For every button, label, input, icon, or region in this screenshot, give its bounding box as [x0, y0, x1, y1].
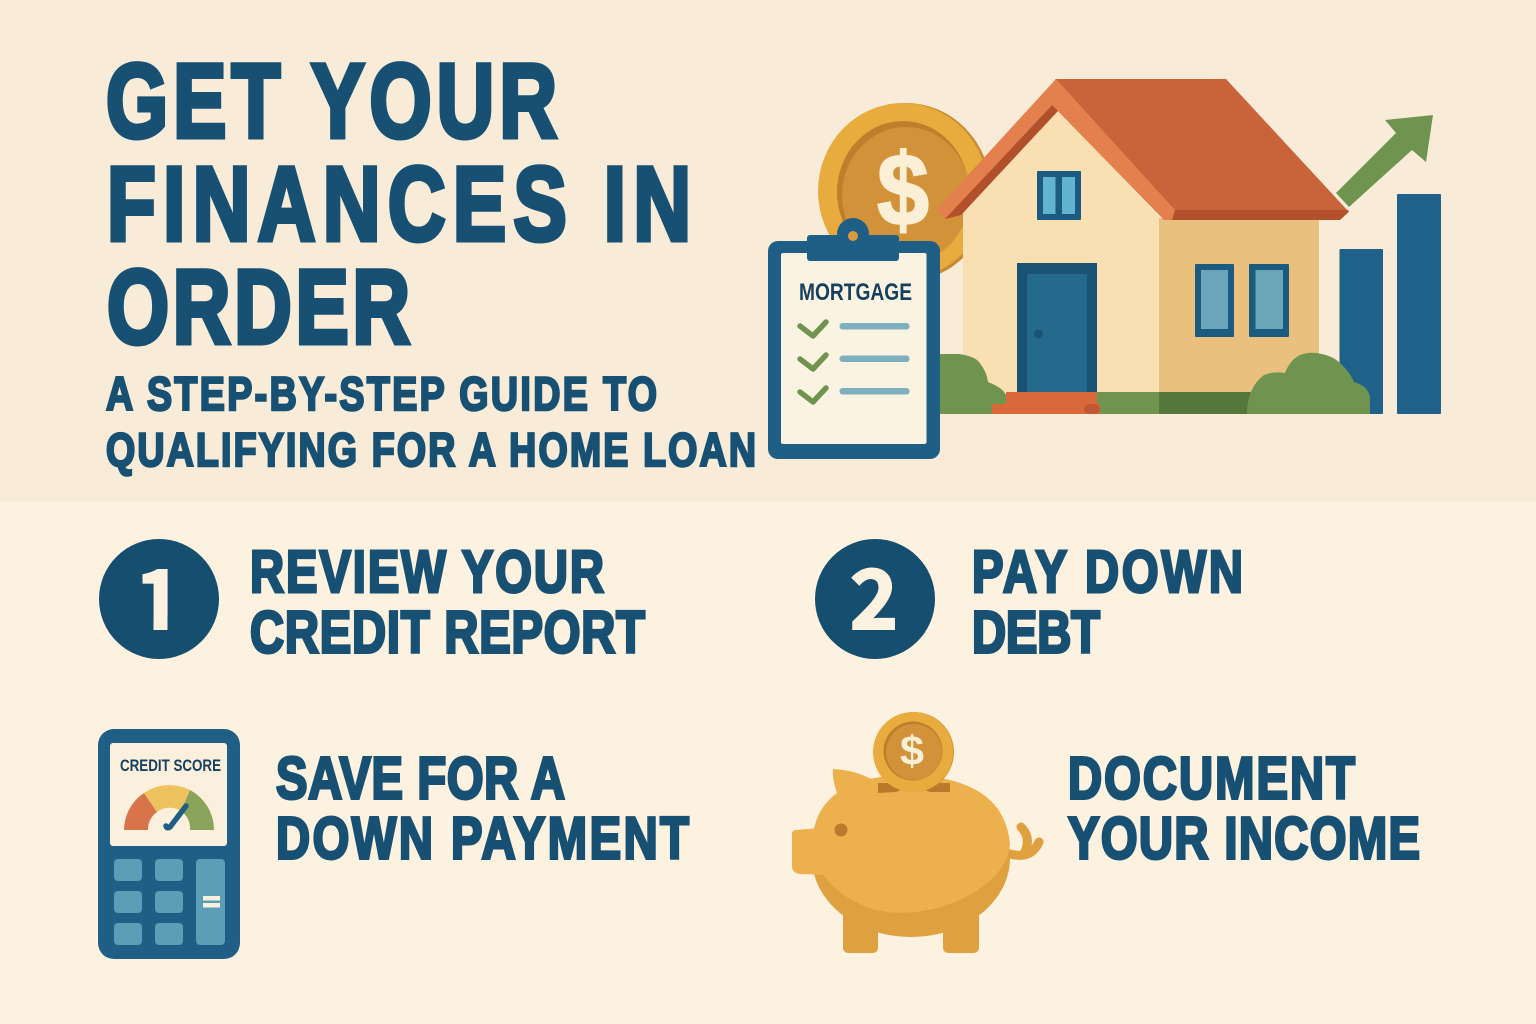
lawn — [1097, 392, 1254, 414]
house front wall — [963, 110, 1160, 392]
number badge 1 — [99, 534, 219, 659]
step 3 label — [276, 747, 689, 872]
clipboard label: MORTGAGE — [799, 279, 912, 306]
step 3 label: SAVE FOR A — [276, 747, 565, 812]
step 2 label: PAY DOWN — [972, 540, 1243, 605]
step 2 — [815, 534, 1243, 666]
checklist — [800, 322, 910, 402]
bar chart with growth arrow — [1336, 115, 1441, 414]
bush left — [940, 354, 1008, 414]
illustration: house — [936, 79, 1370, 414]
icon: gold dollar coin: $ — [877, 133, 929, 247]
front steps — [992, 392, 1100, 414]
title — [106, 42, 691, 366]
legs — [843, 900, 878, 953]
house side wall — [1159, 218, 1319, 392]
step 1 label: REVIEW YOUR — [250, 540, 604, 605]
step 1 — [99, 534, 645, 666]
icon: credit score calculator: CREDIT SCORE — [120, 756, 221, 775]
step 4 label — [1068, 747, 1420, 872]
step 4 label: YOUR INCOME — [1068, 807, 1420, 872]
roof trim — [936, 79, 1175, 220]
body shadow — [812, 779, 1010, 937]
title: GET YOUR — [106, 42, 557, 160]
title: FINANCES IN — [107, 145, 691, 263]
step 1 label: CREDIT REPORT — [250, 601, 645, 666]
icon: gold dollar coin — [818, 103, 991, 281]
number badge 2 — [815, 534, 935, 659]
title: ORDER — [107, 248, 410, 366]
subtitle: QUALIFYING FOR A HOME LOAN — [106, 424, 756, 477]
step 2 label: DEBT — [972, 601, 1100, 666]
step 3 label: DOWN PAYMENT — [276, 807, 689, 872]
number badge 2: 2 — [850, 534, 898, 653]
step 2 label — [972, 540, 1243, 666]
slot — [878, 783, 950, 793]
roof — [1055, 79, 1349, 220]
subtitle — [106, 368, 756, 477]
icon: piggy bank with coin: $ — [900, 727, 924, 774]
calculator keys — [114, 859, 225, 945]
credit score gauge — [124, 785, 214, 830]
step 1 label — [250, 540, 645, 666]
right windows — [1195, 264, 1289, 337]
ear — [833, 769, 873, 796]
eye — [834, 824, 848, 836]
door — [1017, 263, 1097, 392]
number badge 1: 1 — [135, 534, 183, 653]
icon: mortgage clipboard — [768, 218, 940, 459]
body — [812, 775, 1010, 913]
attic window — [1037, 171, 1081, 220]
coin — [874, 712, 954, 792]
bush right — [1247, 353, 1370, 414]
step 4 label: DOCUMENT — [1068, 747, 1355, 812]
icon: piggy bank with coin — [792, 712, 1039, 953]
icon: credit score calculator — [98, 729, 240, 959]
subtitle: A STEP-BY-STEP GUIDE TO — [106, 368, 657, 421]
snout — [792, 828, 830, 875]
tail — [1004, 827, 1039, 855]
